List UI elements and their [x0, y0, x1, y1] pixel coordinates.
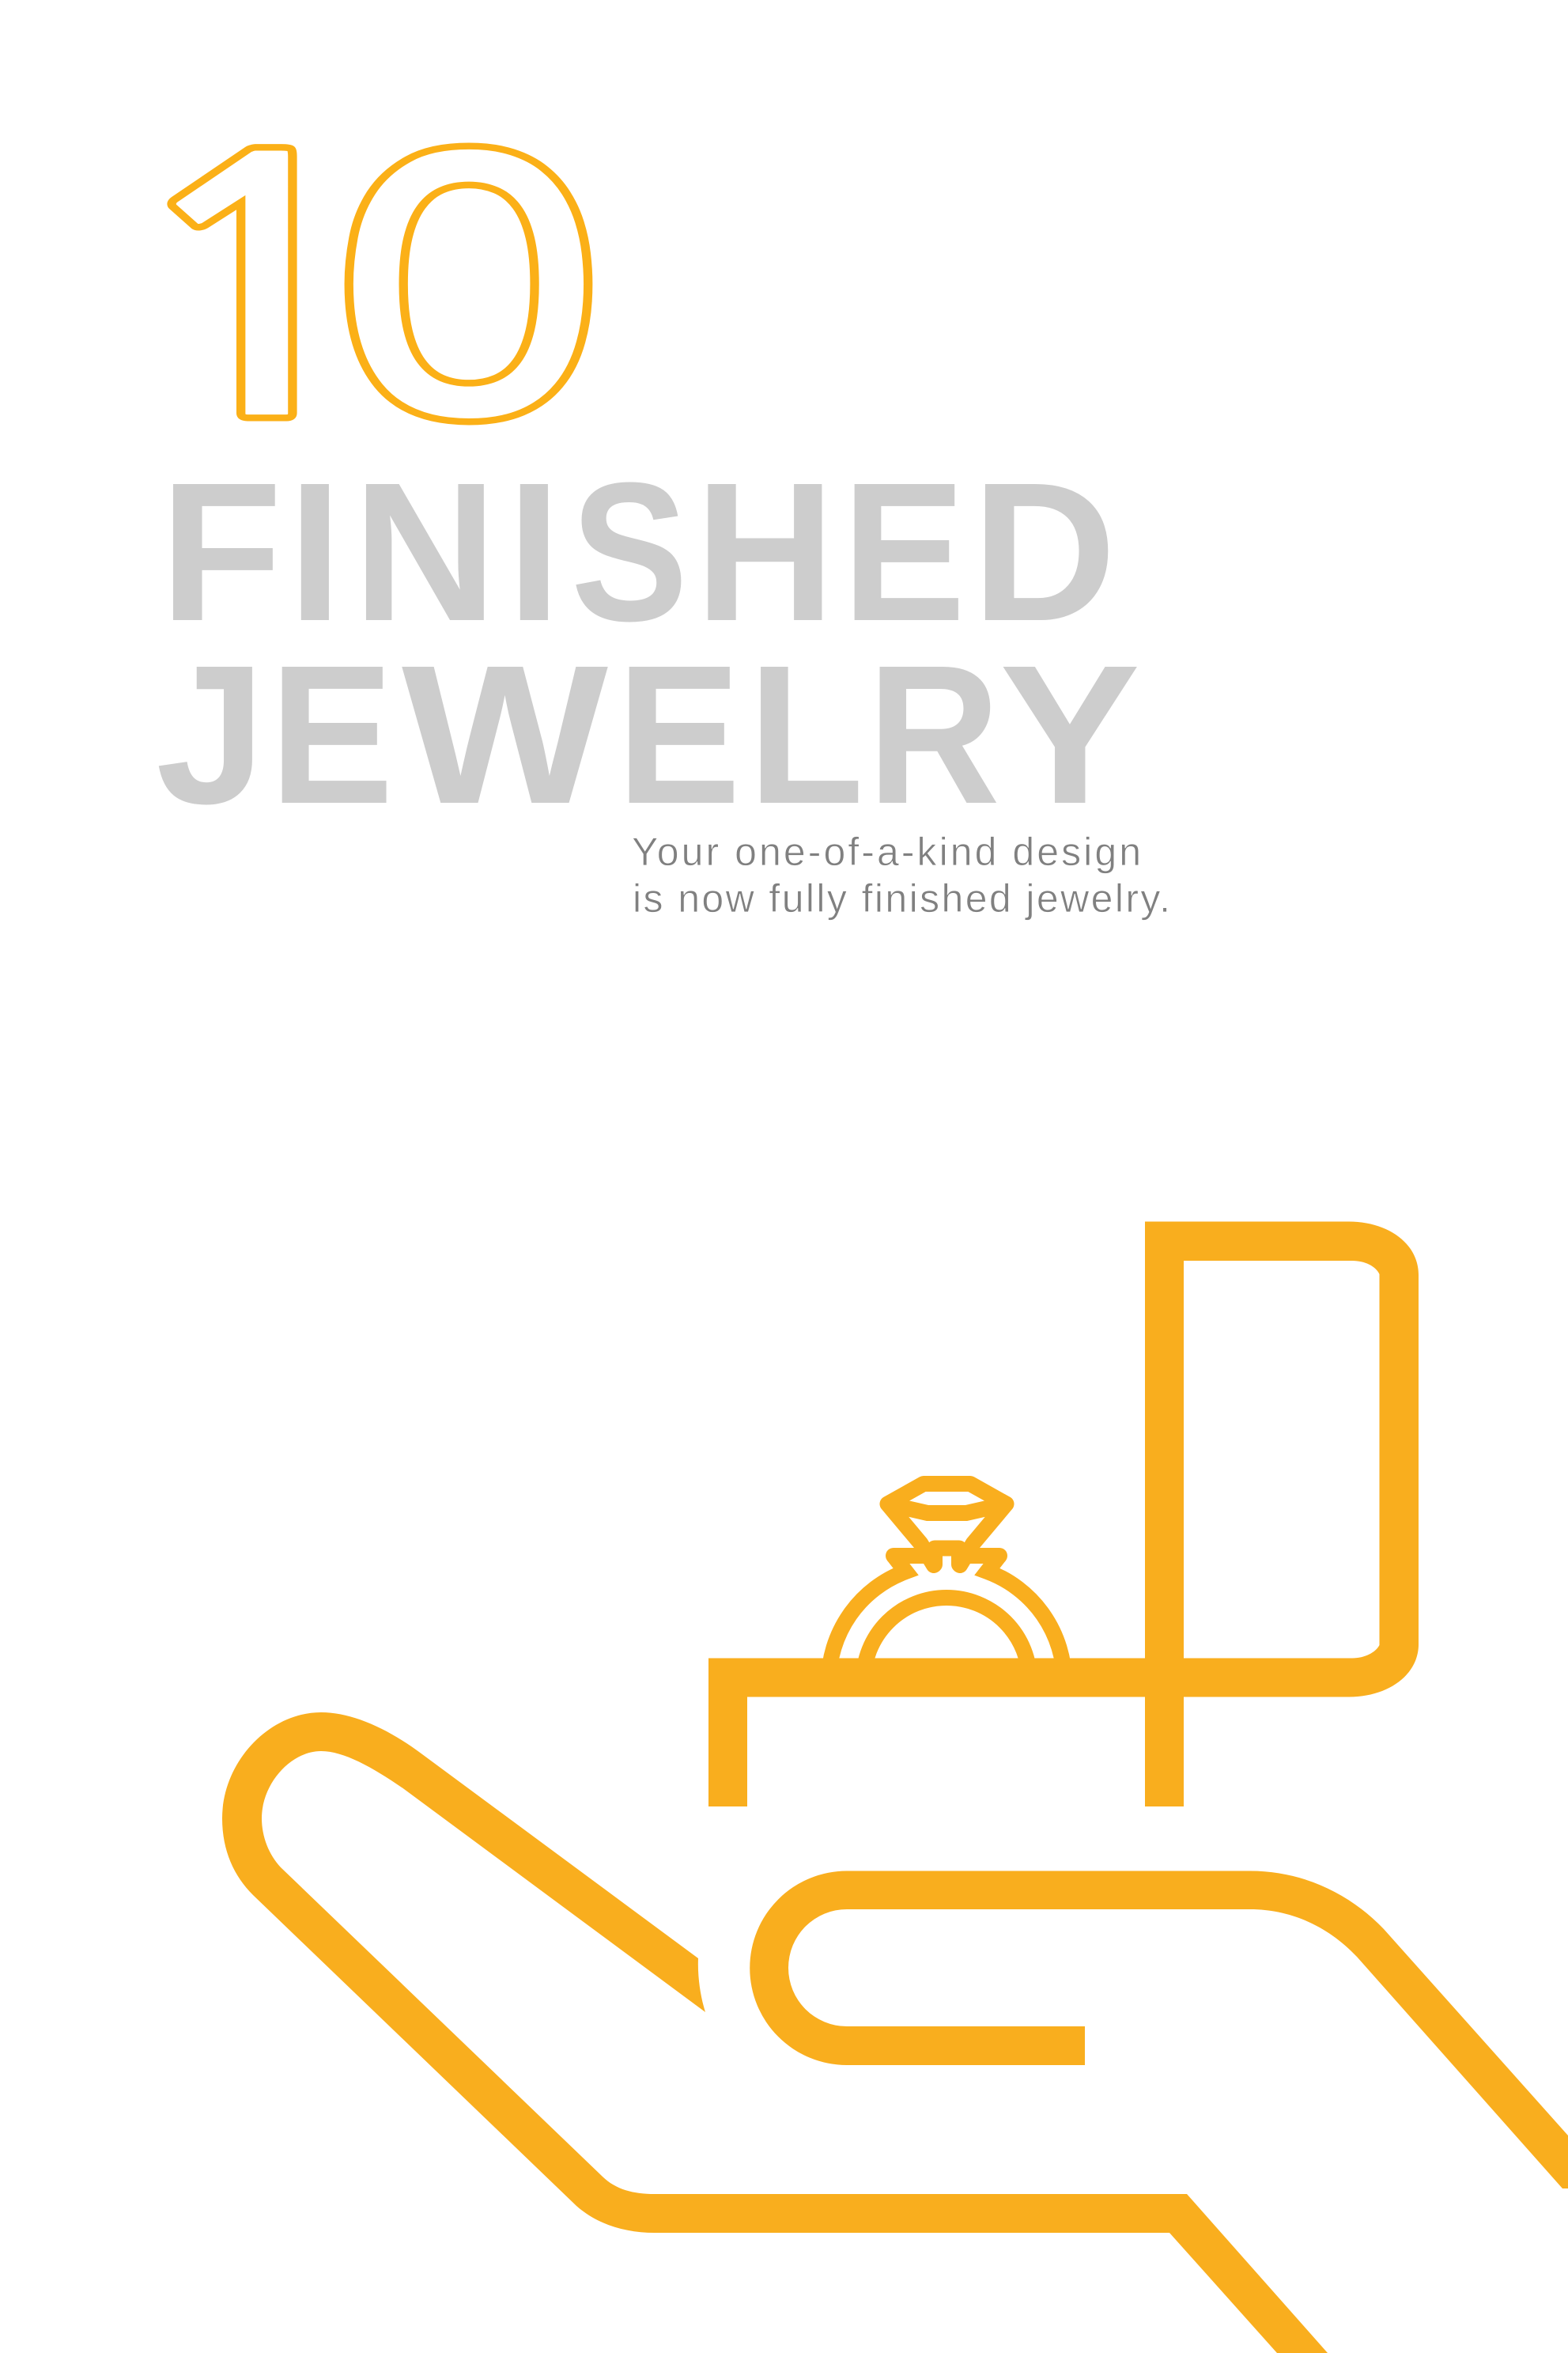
- heading: finished jewelry: H: [695, 441, 835, 662]
- heading: finished jewelry: E: [270, 624, 394, 845]
- step number 10: 0: [322, 119, 612, 472]
- heading: finished jewelry: E: [617, 624, 741, 845]
- ring outer band: [829, 1556, 1064, 1682]
- heading: finished jewelry: [156, 441, 1140, 845]
- subtitle text: [632, 830, 1170, 921]
- heading: finished jewelry: L: [748, 624, 864, 845]
- step number 10: [110, 117, 612, 472]
- icon: open ring box: [708, 1221, 1419, 1806]
- heading: finished jewelry: F: [160, 441, 282, 662]
- icon: hand thumb and wrist: [750, 1871, 1568, 2188]
- heading: finished jewelry: I: [288, 441, 342, 662]
- heading: finished jewelry: E: [842, 441, 965, 662]
- heading: finished jewelry: D: [972, 441, 1116, 662]
- step number 10: 1: [110, 117, 402, 470]
- icon: hand fingers and palm: [222, 1712, 1328, 2353]
- diamond: [887, 1484, 1006, 1565]
- heading: finished jewelry: Y: [999, 624, 1140, 845]
- heading: finished jewelry: S: [571, 441, 688, 662]
- ring setting bar and prongs: [894, 1549, 999, 1564]
- heading: finished jewelry: R: [867, 624, 1000, 845]
- heading: finished jewelry: N: [353, 441, 497, 662]
- heading: finished jewelry: I: [508, 441, 561, 662]
- subtitle text: is now fully finished jewelry.: [633, 876, 1170, 921]
- heading: finished jewelry: W: [402, 624, 608, 845]
- ring inner band: [863, 1598, 1030, 1681]
- icon: ring: [829, 1484, 1064, 1682]
- subtitle text: Your one-of-a-kind design: [632, 830, 1141, 874]
- heading: finished jewelry: J: [156, 624, 266, 845]
